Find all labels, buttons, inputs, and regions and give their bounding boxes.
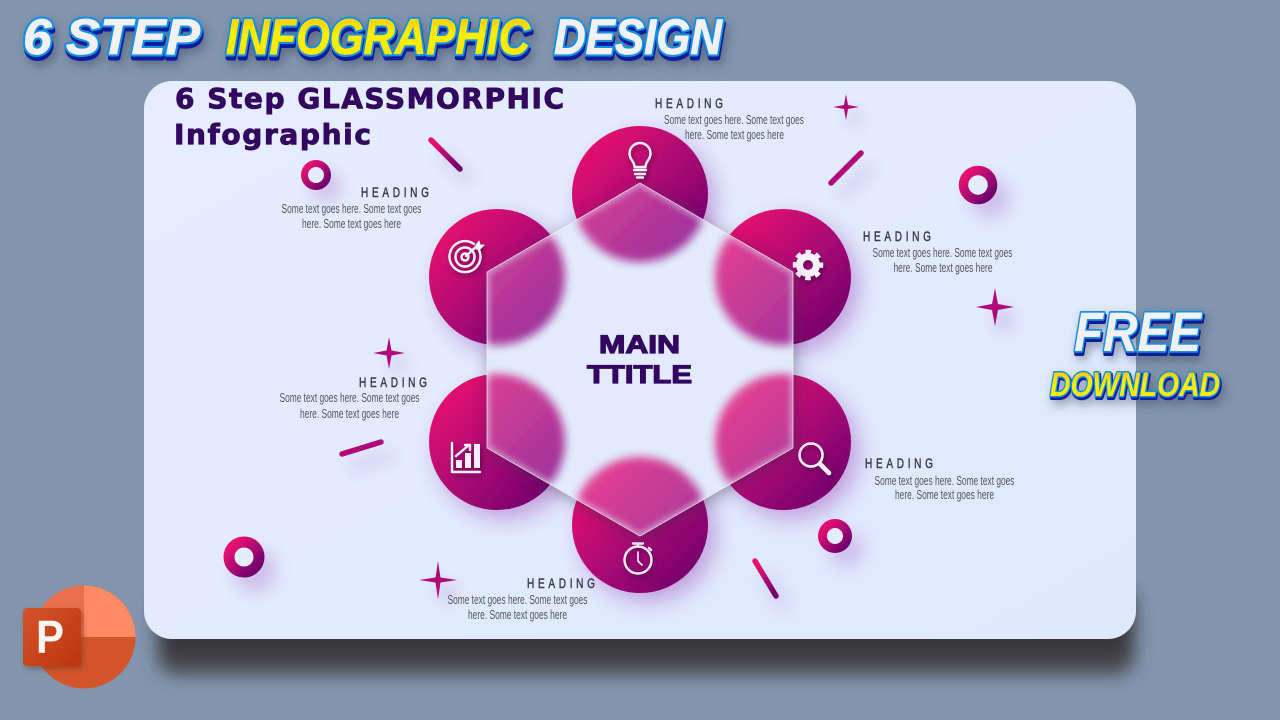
- banner title: 6 STEP: [23, 9, 201, 65]
- free download label: DOWNLOAD: [1051, 368, 1221, 406]
- card title: Infographic: [174, 118, 371, 151]
- banner title: INFOGRAPHIC: [226, 9, 531, 65]
- step 2 text: [863, 228, 1012, 275]
- icon: gear: [794, 252, 822, 278]
- banner title: DESIGN: [554, 9, 723, 65]
- free download label: FREE: [1074, 300, 1202, 363]
- main title: TTITLE: [587, 361, 692, 389]
- icon: magnifier: [800, 444, 829, 473]
- banner title: 6 STEP: [23, 9, 201, 65]
- step 1 text: HEADING: [655, 95, 723, 111]
- step 3 text: here. Some text goes here: [895, 488, 994, 502]
- icon: PowerPoint logo: P: [36, 611, 64, 663]
- banner title: INFOGRAPHIC: [227, 13, 532, 69]
- icon: light bulb: [630, 143, 650, 178]
- step 2 text: Some text goes here. Some text goes: [872, 246, 1012, 260]
- step 2 text: here. Some text goes here: [894, 261, 993, 275]
- main title: MAIN: [599, 331, 680, 359]
- step 6 text: Some text goes here. Some text goes: [282, 202, 422, 216]
- step 2 text: HEADING: [863, 228, 931, 244]
- step 4 text: [448, 575, 595, 622]
- step 3 text: Some text goes here. Some text goes: [874, 474, 1014, 488]
- icon: bar chart: [452, 443, 480, 472]
- decorative shapes: [229, 94, 1014, 609]
- step 1 text: here. Some text goes here: [685, 128, 784, 142]
- step 5 text: [280, 374, 427, 421]
- icon: PowerPoint logo: [23, 586, 136, 688]
- step 5 text: here. Some text goes here: [300, 407, 399, 421]
- free download label: FREE: [1075, 303, 1203, 366]
- step 3 text: HEADING: [865, 455, 933, 471]
- step 5 text: HEADING: [359, 374, 427, 390]
- main card shadow: [158, 590, 1134, 675]
- banner title: 6 STEP: [24, 13, 202, 69]
- card title: [174, 82, 564, 151]
- icon: stopwatch: [624, 544, 652, 574]
- step 6 text: [282, 184, 429, 231]
- step 1 text: [655, 95, 804, 142]
- center glass hexagon: [478, 182, 806, 548]
- step 1 text: Some text goes here. Some text goes: [664, 113, 804, 127]
- free download label: [1050, 300, 1221, 406]
- banner title: DESIGN: [554, 9, 723, 65]
- free download label: DOWNLOAD: [1050, 366, 1220, 404]
- banner title: [23, 9, 724, 69]
- icon: target: [449, 241, 484, 272]
- card title: 6 Step GLASSMORPHIC: [175, 82, 564, 115]
- six step circles: [429, 126, 859, 602]
- step 4 text: HEADING: [527, 575, 595, 591]
- banner title: INFOGRAPHIC: [226, 9, 531, 65]
- main card panel: [144, 81, 1136, 639]
- step 4 text: Some text goes here. Some text goes: [448, 593, 588, 607]
- banner title: DESIGN: [555, 13, 724, 69]
- step 6 text: here. Some text goes here: [302, 217, 401, 231]
- step 4 text: here. Some text goes here: [468, 608, 567, 622]
- step 3 text: [865, 455, 1014, 502]
- step 5 text: Some text goes here. Some text goes: [280, 391, 420, 405]
- step 6 text: HEADING: [361, 184, 429, 200]
- main title: [587, 331, 692, 389]
